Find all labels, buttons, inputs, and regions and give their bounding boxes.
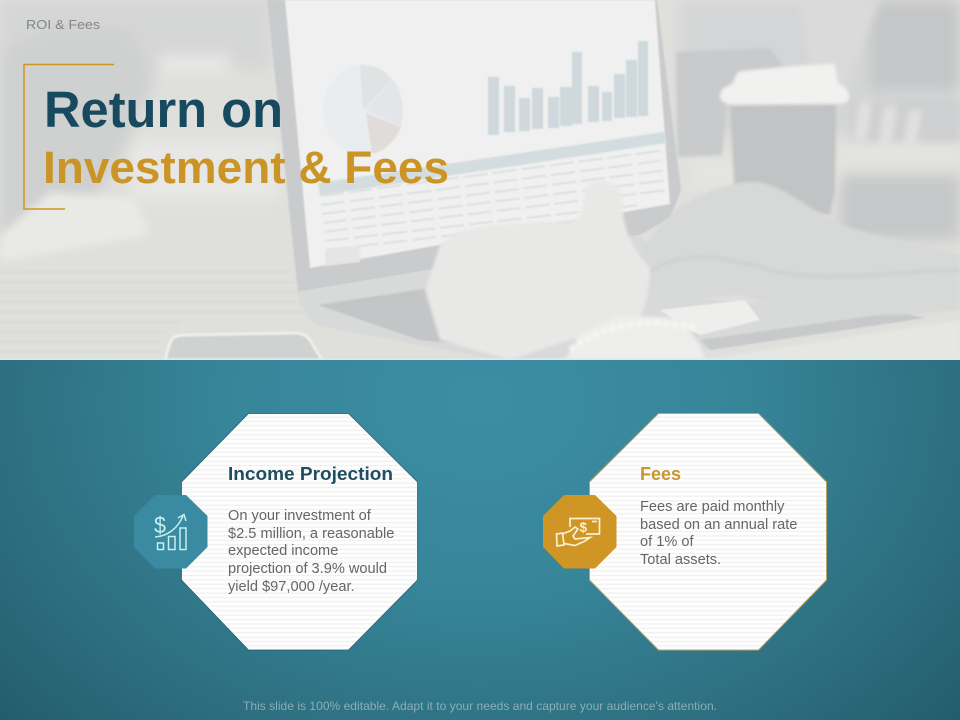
fees body text: of 1% of (640, 534, 694, 550)
laptop screen (285, 0, 670, 268)
panel: teal lower background (0, 360, 960, 720)
coffee cups (676, 48, 849, 215)
phone on desk (165, 333, 322, 360)
icon: dollar growth chart: $ (154, 512, 166, 538)
title bracket (24, 64, 114, 209)
fees heading: Fees (640, 464, 681, 484)
fees body text: based on an annual rate (640, 517, 797, 533)
title line 2: Investment & Fees (43, 142, 449, 193)
fees body text: Fees are paid monthly (640, 499, 785, 515)
panel: background photo of laptop and hands (0, 0, 960, 360)
panel: fees (543, 414, 826, 650)
fees body text: Total assets. (640, 552, 721, 568)
income octagon (182, 414, 418, 650)
income heading: Income Projection (228, 464, 393, 484)
desk wood grain (0, 272, 305, 352)
income body text: On your investment of (228, 508, 372, 524)
income body text: expected income (228, 543, 338, 559)
footer note: This slide is 100% editable. Adapt it to your needs and capture your audience's attention. (243, 699, 717, 713)
title line 1: Return on (44, 81, 283, 138)
header label: ROI & Fees (26, 17, 101, 32)
income body text: $2.5 million, a reasonable (228, 526, 394, 542)
income body text: projection of 3.9% would (228, 561, 387, 577)
fees octagon (590, 414, 826, 650)
panel: income projection (134, 414, 418, 650)
screen chart: pie (360, 65, 402, 154)
screen chart: monthly bars (488, 41, 648, 135)
title (43, 81, 449, 193)
icon: dollar growth chart (154, 512, 186, 550)
laptop body (267, 0, 681, 292)
desk and blurred backdrop (0, 0, 960, 245)
icon: hand holding banknote (556, 518, 600, 546)
income icon badge (134, 495, 208, 568)
screen table (318, 132, 668, 266)
income body text (228, 508, 394, 595)
fees body text (640, 499, 797, 568)
fees icon badge (543, 495, 616, 568)
laptop base and keyboard (318, 288, 923, 350)
income body text: yield $97,000 /year. (228, 579, 355, 595)
hands (425, 181, 960, 360)
icon: hand holding banknote: $ (580, 520, 588, 535)
